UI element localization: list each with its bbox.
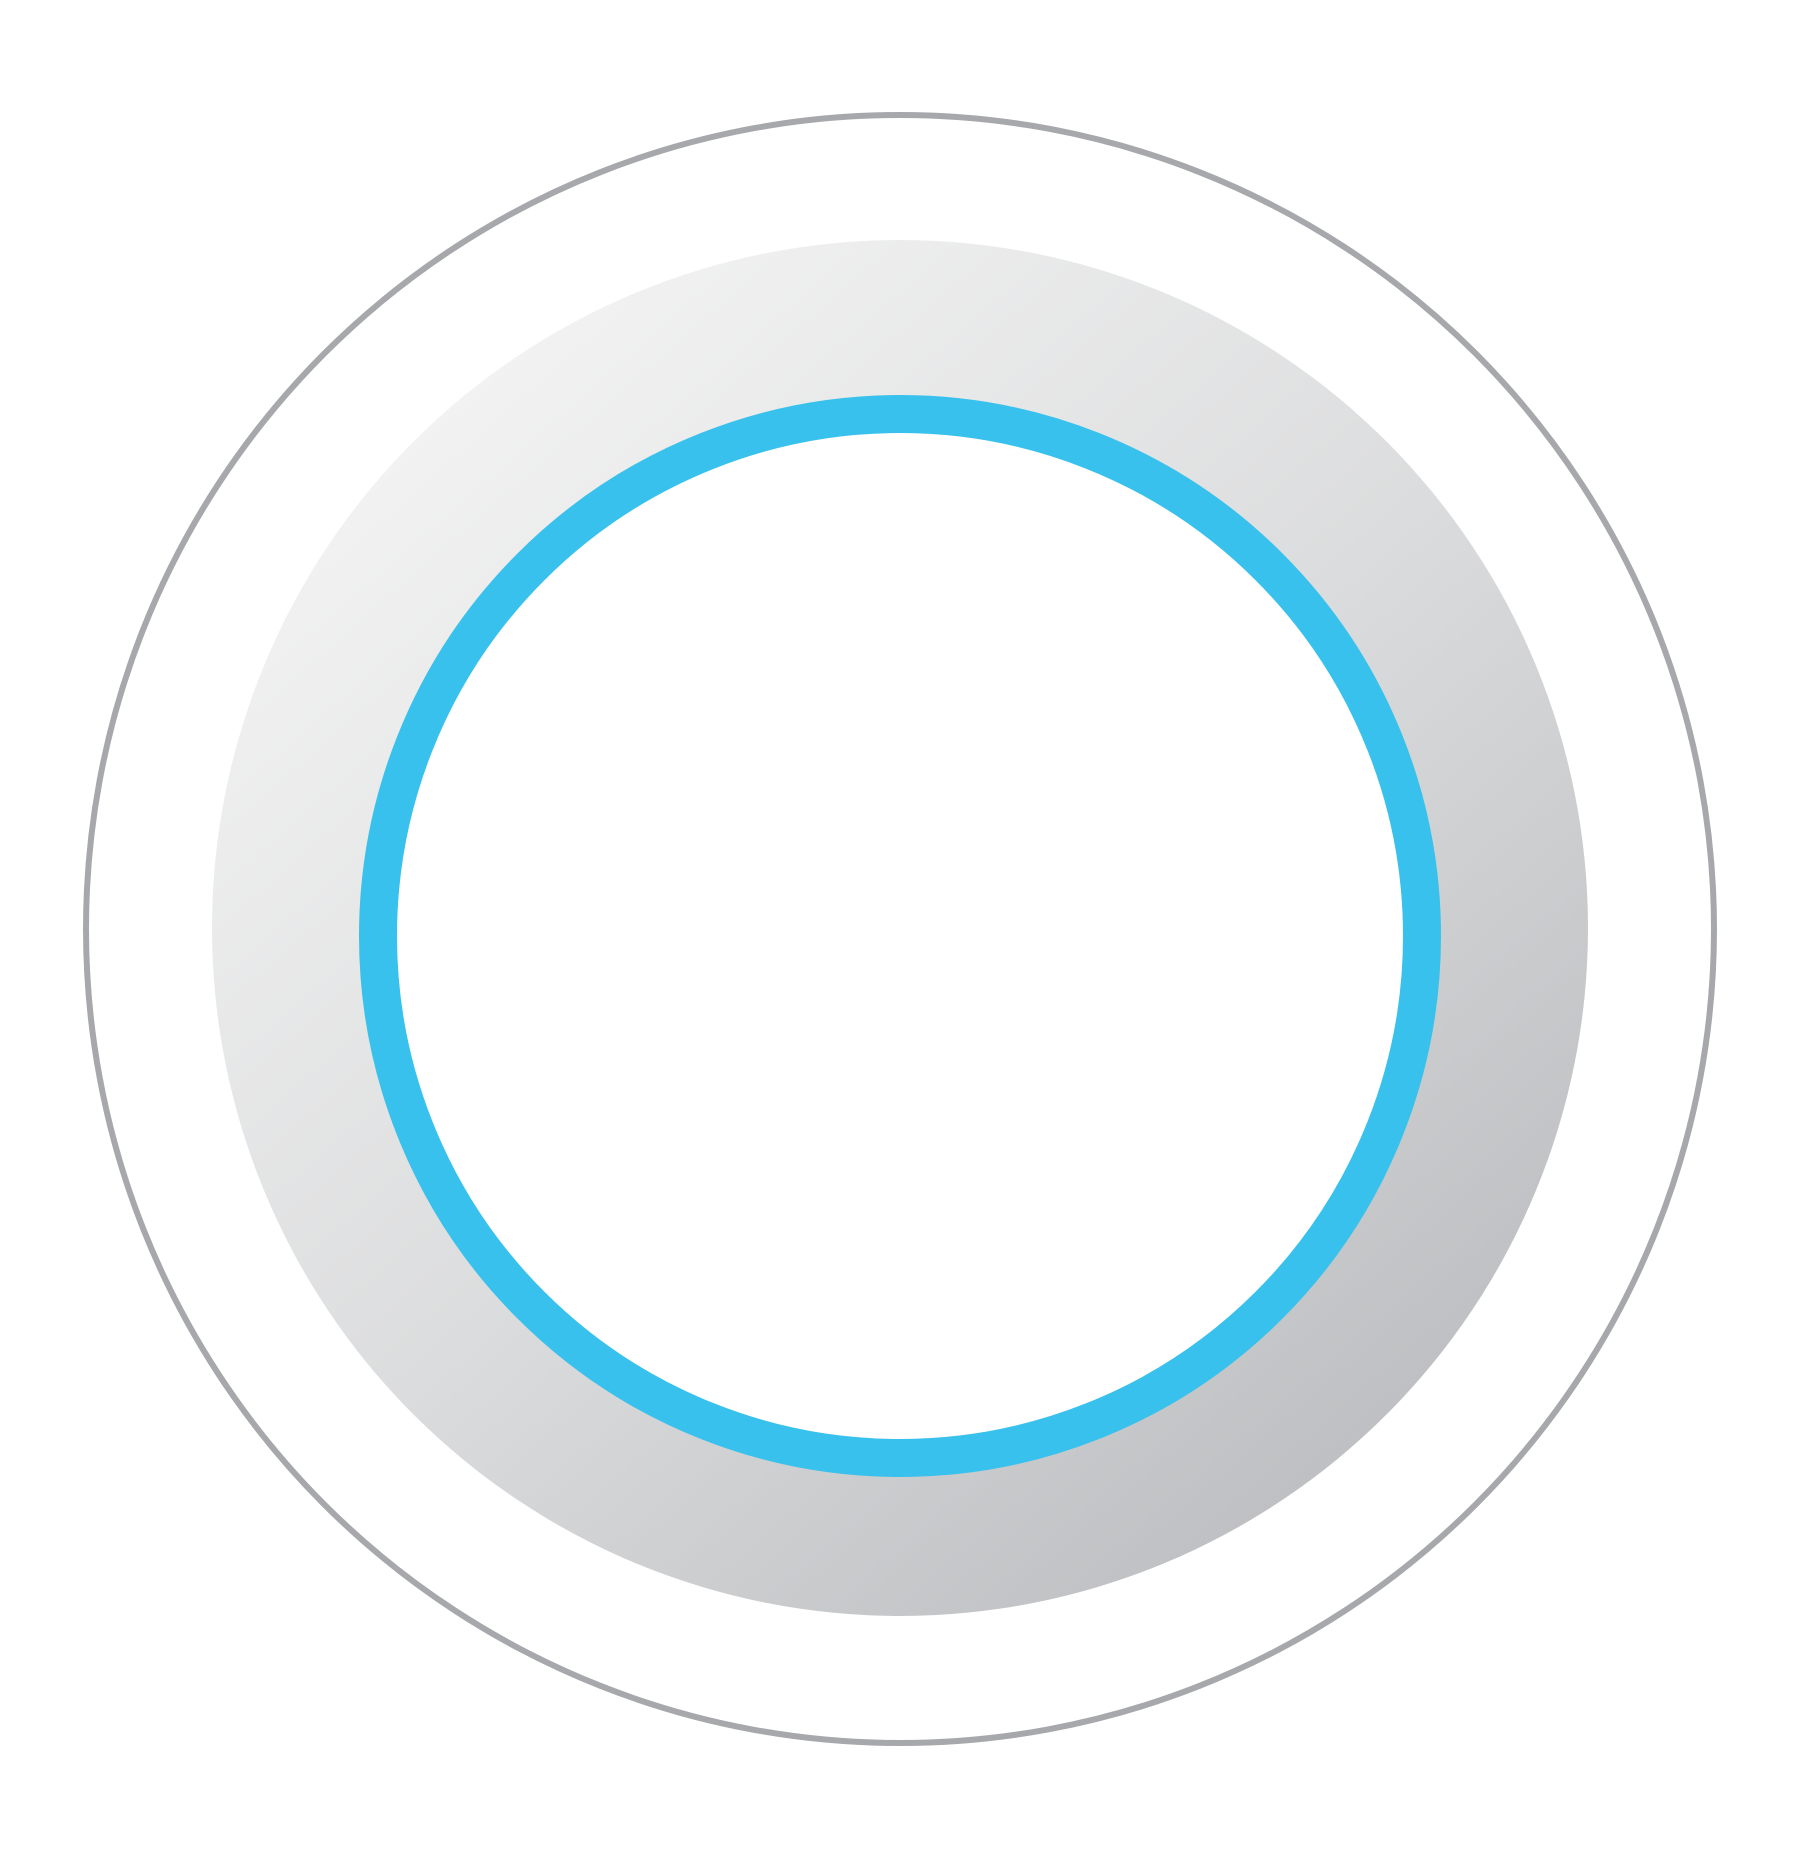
gray gradient disk (212, 240, 1588, 1616)
outer thin ring (86, 115, 1714, 1743)
blue ring with white center (378, 414, 1422, 1458)
